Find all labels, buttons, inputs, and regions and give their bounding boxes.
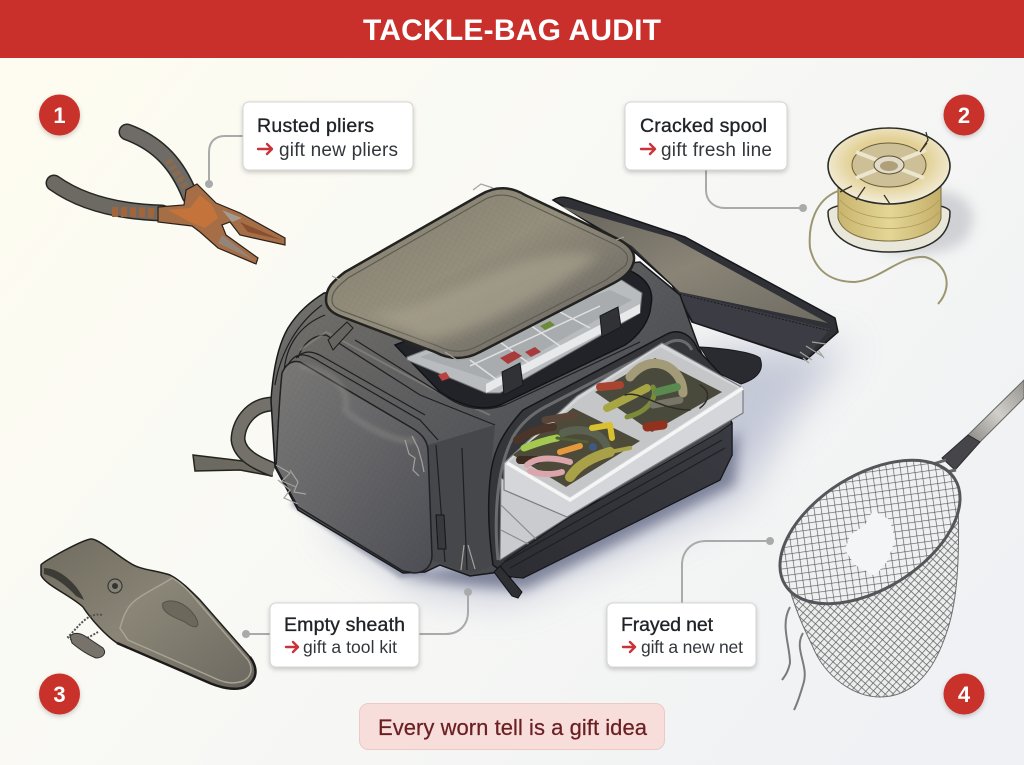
left compartment floor with lures [513, 408, 640, 487]
step badge 3: 3 [53, 682, 66, 707]
callout: cracked spool: Cracked spool [640, 115, 767, 137]
cracks [840, 132, 928, 204]
right compartment floor with lures [595, 358, 722, 432]
net bag [783, 500, 959, 697]
callout: frayed net: Frayed net [621, 614, 714, 636]
illustration: worn tackle bag [193, 184, 838, 598]
callout: rusted pliers: gift new pliers [279, 140, 398, 161]
tray shell [504, 343, 743, 517]
loose line [810, 191, 947, 304]
pocket zipper pull [328, 322, 353, 350]
lower dark pocket [496, 423, 732, 578]
lower handle [54, 183, 162, 213]
tray rim [507, 388, 743, 500]
top zip flap [326, 184, 634, 360]
sheath back [41, 539, 255, 689]
title banner: TACKLE-BAG AUDIT [363, 14, 661, 47]
torn hole [845, 510, 895, 576]
leader line: cracked spool [706, 170, 807, 212]
step badge 3 [39, 674, 80, 714]
soft lures [517, 363, 708, 477]
title banner [0, 0, 1024, 58]
callout: frayed net: gift a new net [641, 637, 743, 657]
step badge 2: 2 [958, 103, 970, 128]
net hoop [755, 431, 985, 633]
rusted head and jaws [158, 184, 285, 264]
upper clear tackle tray [407, 277, 642, 395]
bottom takeaway pill: Every worn tell is a gift idea [378, 715, 648, 740]
leader line: rusted pliers [205, 136, 243, 188]
callout: empty sheath [270, 603, 419, 667]
upper handle [127, 132, 190, 196]
sheath front pocket [120, 578, 251, 683]
stacked trays beneath [500, 478, 568, 560]
top flange [828, 128, 950, 204]
illustration: rusted pliers [54, 132, 285, 264]
callout: empty sheath: Empty sheath [284, 614, 405, 636]
illustration: frayed landing net [755, 380, 1024, 710]
side strip between pocket and opening [428, 425, 495, 574]
step badge 2 [944, 94, 984, 136]
bottom takeaway pill [360, 704, 664, 750]
illustration: cracked spool of line [810, 128, 973, 304]
upper compartment opening [355, 265, 652, 409]
leader line: frayed net [682, 537, 774, 603]
callout: cracked spool [625, 102, 787, 170]
hub well [852, 143, 926, 187]
bottom flange [828, 202, 950, 252]
chain and tag [68, 615, 102, 641]
snap rivet [108, 579, 122, 593]
belt loop [44, 568, 84, 600]
open lower tray with soft lures [489, 332, 743, 598]
callout: rusted pliers: Rusted pliers [257, 115, 374, 137]
dark lower edge of the sheath [117, 643, 255, 689]
step badge 4: 4 [958, 682, 971, 707]
bag main body [271, 262, 732, 578]
callout: frayed net [607, 603, 756, 667]
spool shadow [880, 190, 973, 254]
cast shadow of the bag [290, 345, 850, 600]
callout: cracked spool: gift fresh line [661, 140, 772, 161]
front pocket [276, 322, 438, 573]
open side lid [553, 197, 838, 363]
loose strands [782, 607, 805, 710]
leader line: empty sheath [242, 588, 472, 638]
net handle [968, 380, 1024, 442]
wound line [838, 180, 941, 241]
illustration: empty sheath [41, 539, 255, 689]
net mesh inside hoop [782, 462, 958, 602]
callout: empty sheath: gift a tool kit [303, 637, 397, 657]
callout: rusted pliers [243, 102, 413, 170]
bag back straps [193, 347, 761, 476]
step badge 4 [944, 674, 984, 714]
step badge 1: 1 [53, 103, 66, 128]
shoulder stripes [275, 305, 495, 425]
tray inner walls [509, 347, 738, 497]
zipper arch of lower compartment [489, 332, 740, 578]
step badge 1 [39, 94, 80, 136]
front zipper pull [494, 566, 522, 598]
